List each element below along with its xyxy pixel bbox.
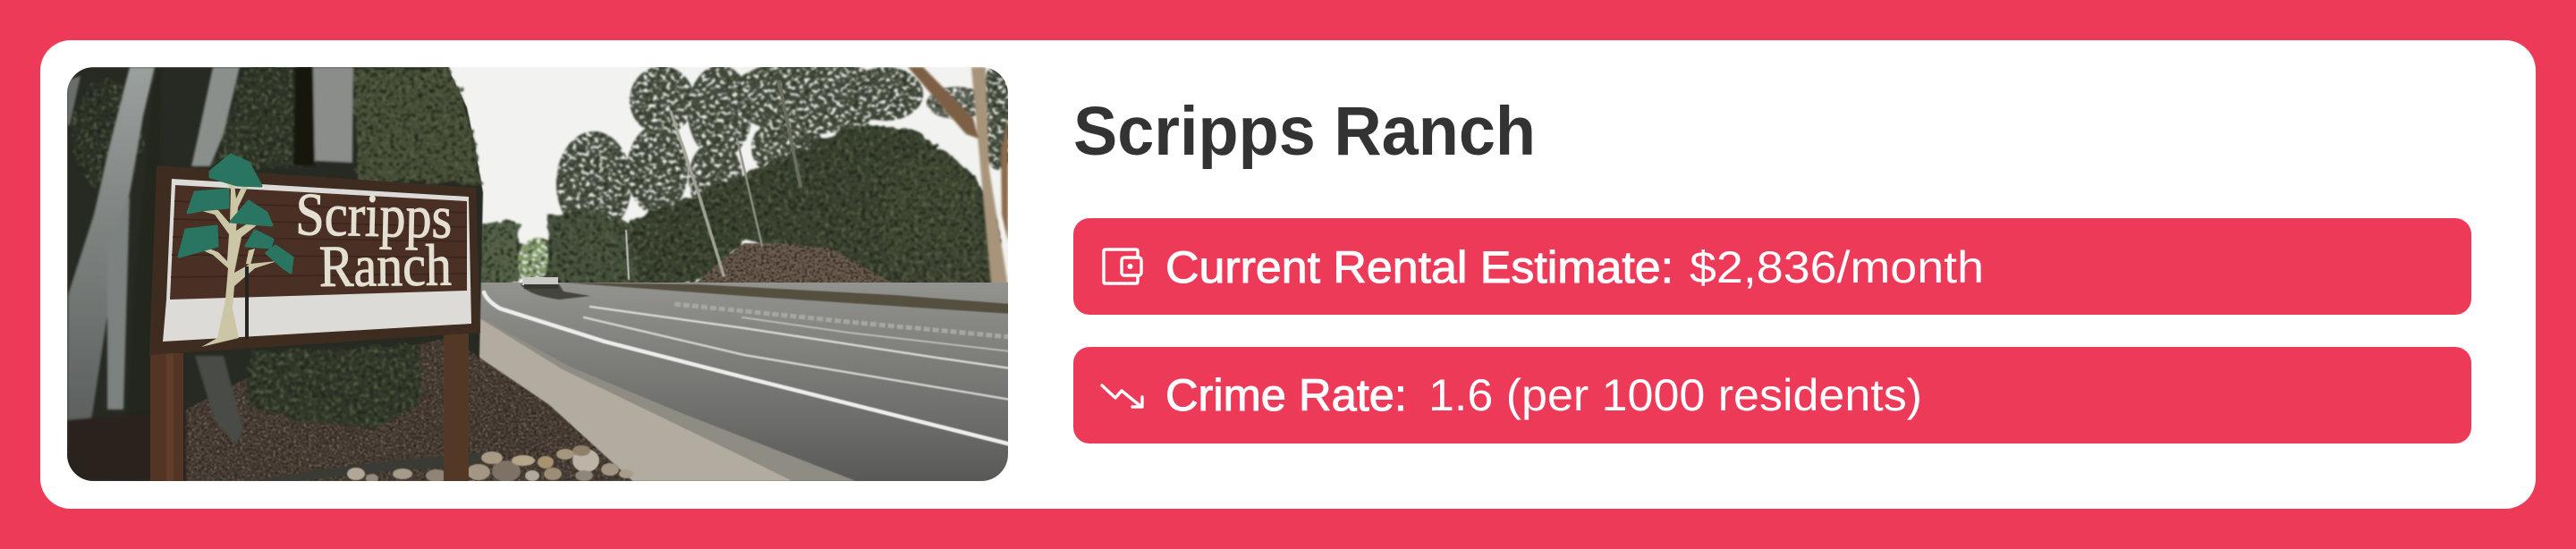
sign wood grain [171,201,467,277]
right bushes overlapping slope base [967,243,969,244]
wooden sign posts [150,333,469,483]
gutter band [481,319,856,481]
sign lettering: Scripps [295,180,453,251]
right thin trunks and lamp post [626,82,801,279]
brown dirt slope [696,242,892,283]
road surface [474,283,1011,484]
river rocks [347,445,633,483]
mulch bed [67,338,632,481]
traffic island and cars [521,277,590,300]
gravel median [674,304,1011,337]
sidewalk [469,319,793,481]
heading: Scripps Ranch [1073,93,1536,170]
sign board [149,155,480,355]
left dark foliage backdrop [67,67,483,481]
large eucalyptus trunk at right edge [907,67,1008,283]
sign wood panel [170,185,467,300]
sign lettering [299,193,452,287]
icon: wallet [1104,249,1141,283]
label: crime: Crime Rate: [1165,370,1407,420]
value: rental: $2,836/month [1690,242,1984,292]
value: crime: 1.6 (per 1000 residents) [1428,370,1922,420]
left eucalyptus trunks [67,67,354,422]
right dense hillside bushes [544,122,1003,283]
info bar: current rental estimate [1073,218,2471,315]
green bush under sign [246,344,422,427]
sign lettering: Ranch [318,232,452,300]
photo: Scripps Ranch street sign and road [67,59,1018,484]
right trees loose canopy [555,67,1008,220]
info bar: crime rate [1073,347,2471,443]
road markings [484,292,1011,444]
far verge and curb [563,283,1011,314]
sign white frame and lower panel [163,179,471,342]
sign tree emblem [179,155,292,347]
sky [449,67,1008,283]
label: rental: Current Rental Estimate: [1165,242,1674,292]
icon: trending down arrow [1102,385,1142,407]
lower trunk behind sign [195,356,243,444]
distant trees at road bend [480,218,549,283]
log edging [253,452,501,481]
